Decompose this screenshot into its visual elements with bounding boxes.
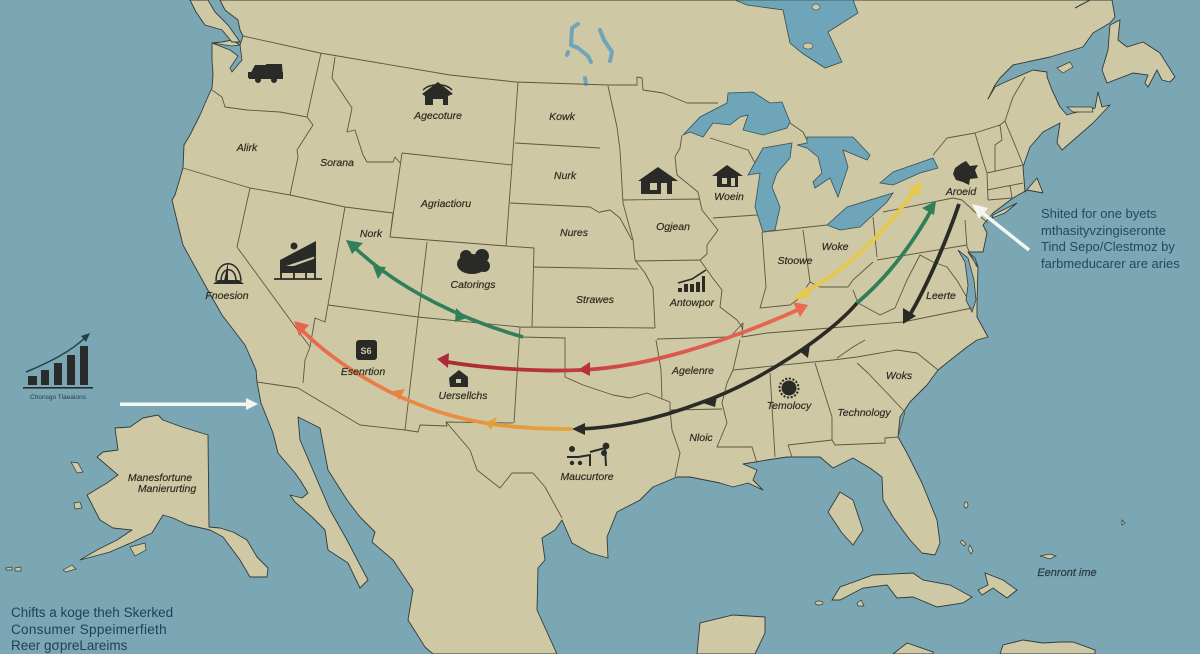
lake islands [803,4,820,49]
land: North America [172,0,1115,654]
arrow: green northeast route [857,201,936,303]
Hispaniola [978,573,1017,598]
map labels: Agelenre [671,365,714,377]
Caribbean and Bahamas islets [815,502,1125,606]
bottom left note: Chifts a koge theh Skerked [11,605,173,620]
Hudson Bay area lake [735,0,858,68]
Lake Ontario [880,158,938,185]
map labels: Technology [837,407,891,419]
Cuba [832,573,972,607]
Alaska islands [6,462,146,572]
map labels: Fnoesion [205,290,249,302]
icon: calculator: S6 [360,346,372,356]
map labels: Alirk [236,142,258,154]
icon: small house [449,370,468,387]
arrow: green northwest route [346,240,523,337]
map labels: Nurk [554,170,577,182]
Chesapeake and Delaware bays [958,250,978,312]
icon: maple gear [953,161,978,185]
Lake Superior [683,92,790,137]
southern land at map bottom [697,615,1095,654]
map labels: Antowpor [669,297,715,309]
bottom left note: Consumer Sppeimerfieth [11,622,167,637]
state and national borders [183,36,1025,518]
icon: house large [638,167,678,194]
Yucatan-shaped gulf island [828,492,863,545]
map labels: Agriactioru [420,198,471,210]
map labels: Aroeid [945,186,977,198]
Lake Michigan [748,143,792,232]
icon: house medium [712,165,743,187]
east coast note [1041,206,1180,271]
map labels: Nork [360,228,383,240]
map labels: Sorana [320,157,354,169]
Quebec inlet [1075,0,1090,8]
Puget Sound [212,43,242,72]
map labels: Ogjean [656,221,690,233]
Gulf of St Lawrence islands [1057,62,1093,112]
east coast note: farbmeducarer are aries [1041,256,1180,271]
chart caption: Chonsgo Tlaeaions [30,394,87,401]
arrow: black southern route [572,303,857,435]
east coast note: mthasityvzingiseronte [1041,223,1166,238]
Vancouver Island and Long Island [190,0,1017,218]
Newfoundland [1102,20,1175,87]
map labels: Stoowe [777,255,813,267]
icon: gear [780,378,798,398]
caribbean label: Eenront ime [1037,567,1097,579]
map labels: Esenrtion [341,366,385,378]
east coast note: Shited for one byets [1041,206,1157,221]
map labels: Catorings [451,279,496,291]
arrow: white east coast pointer [972,204,1029,250]
map labels: Kowk [549,111,576,123]
map labels: Woks [886,370,913,382]
icon: cloud [457,249,490,274]
icon: dome [213,262,244,284]
map labels: Uersellchs [438,390,488,402]
map labels: Nures [560,227,589,239]
map labels: Strawes [576,294,615,306]
map labels: Leerte [926,290,956,302]
icon: calculator [356,340,377,360]
icon: factory [274,241,322,279]
bottom left note: Reer gσpreLareims [11,638,128,653]
east coast note: Tind Sepo/Clestmoz by [1041,239,1175,254]
arrow: black Appalachian route [903,204,959,324]
arrow: yellow Ohio valley route [793,182,922,300]
Lake Huron [797,137,870,197]
icon: linked nodes [567,443,609,466]
map labels: Woke [822,241,849,253]
Lake Erie [827,193,893,230]
icon: truck [248,64,283,83]
Alaska [80,415,268,577]
map labels [128,110,977,495]
map labels: Manesfortune [128,472,192,484]
arrow: orange southwest route [294,321,572,430]
arrow: red central route [437,302,808,376]
map labels: Woein [714,191,744,203]
map labels: Manierurting [138,483,196,495]
map labels: Temolocy [767,400,812,412]
icon: bar chart with trend arrow [23,333,93,389]
arrow: white west coast pointer [120,398,258,410]
map labels: Nloic [689,432,713,444]
icon: barn [422,82,453,105]
Canadian lakes [567,24,612,84]
icon: small trend bars [678,270,706,292]
bottom left note [11,605,173,653]
map labels: Agecoture [413,110,462,122]
map labels: Maucurtore [560,471,614,483]
